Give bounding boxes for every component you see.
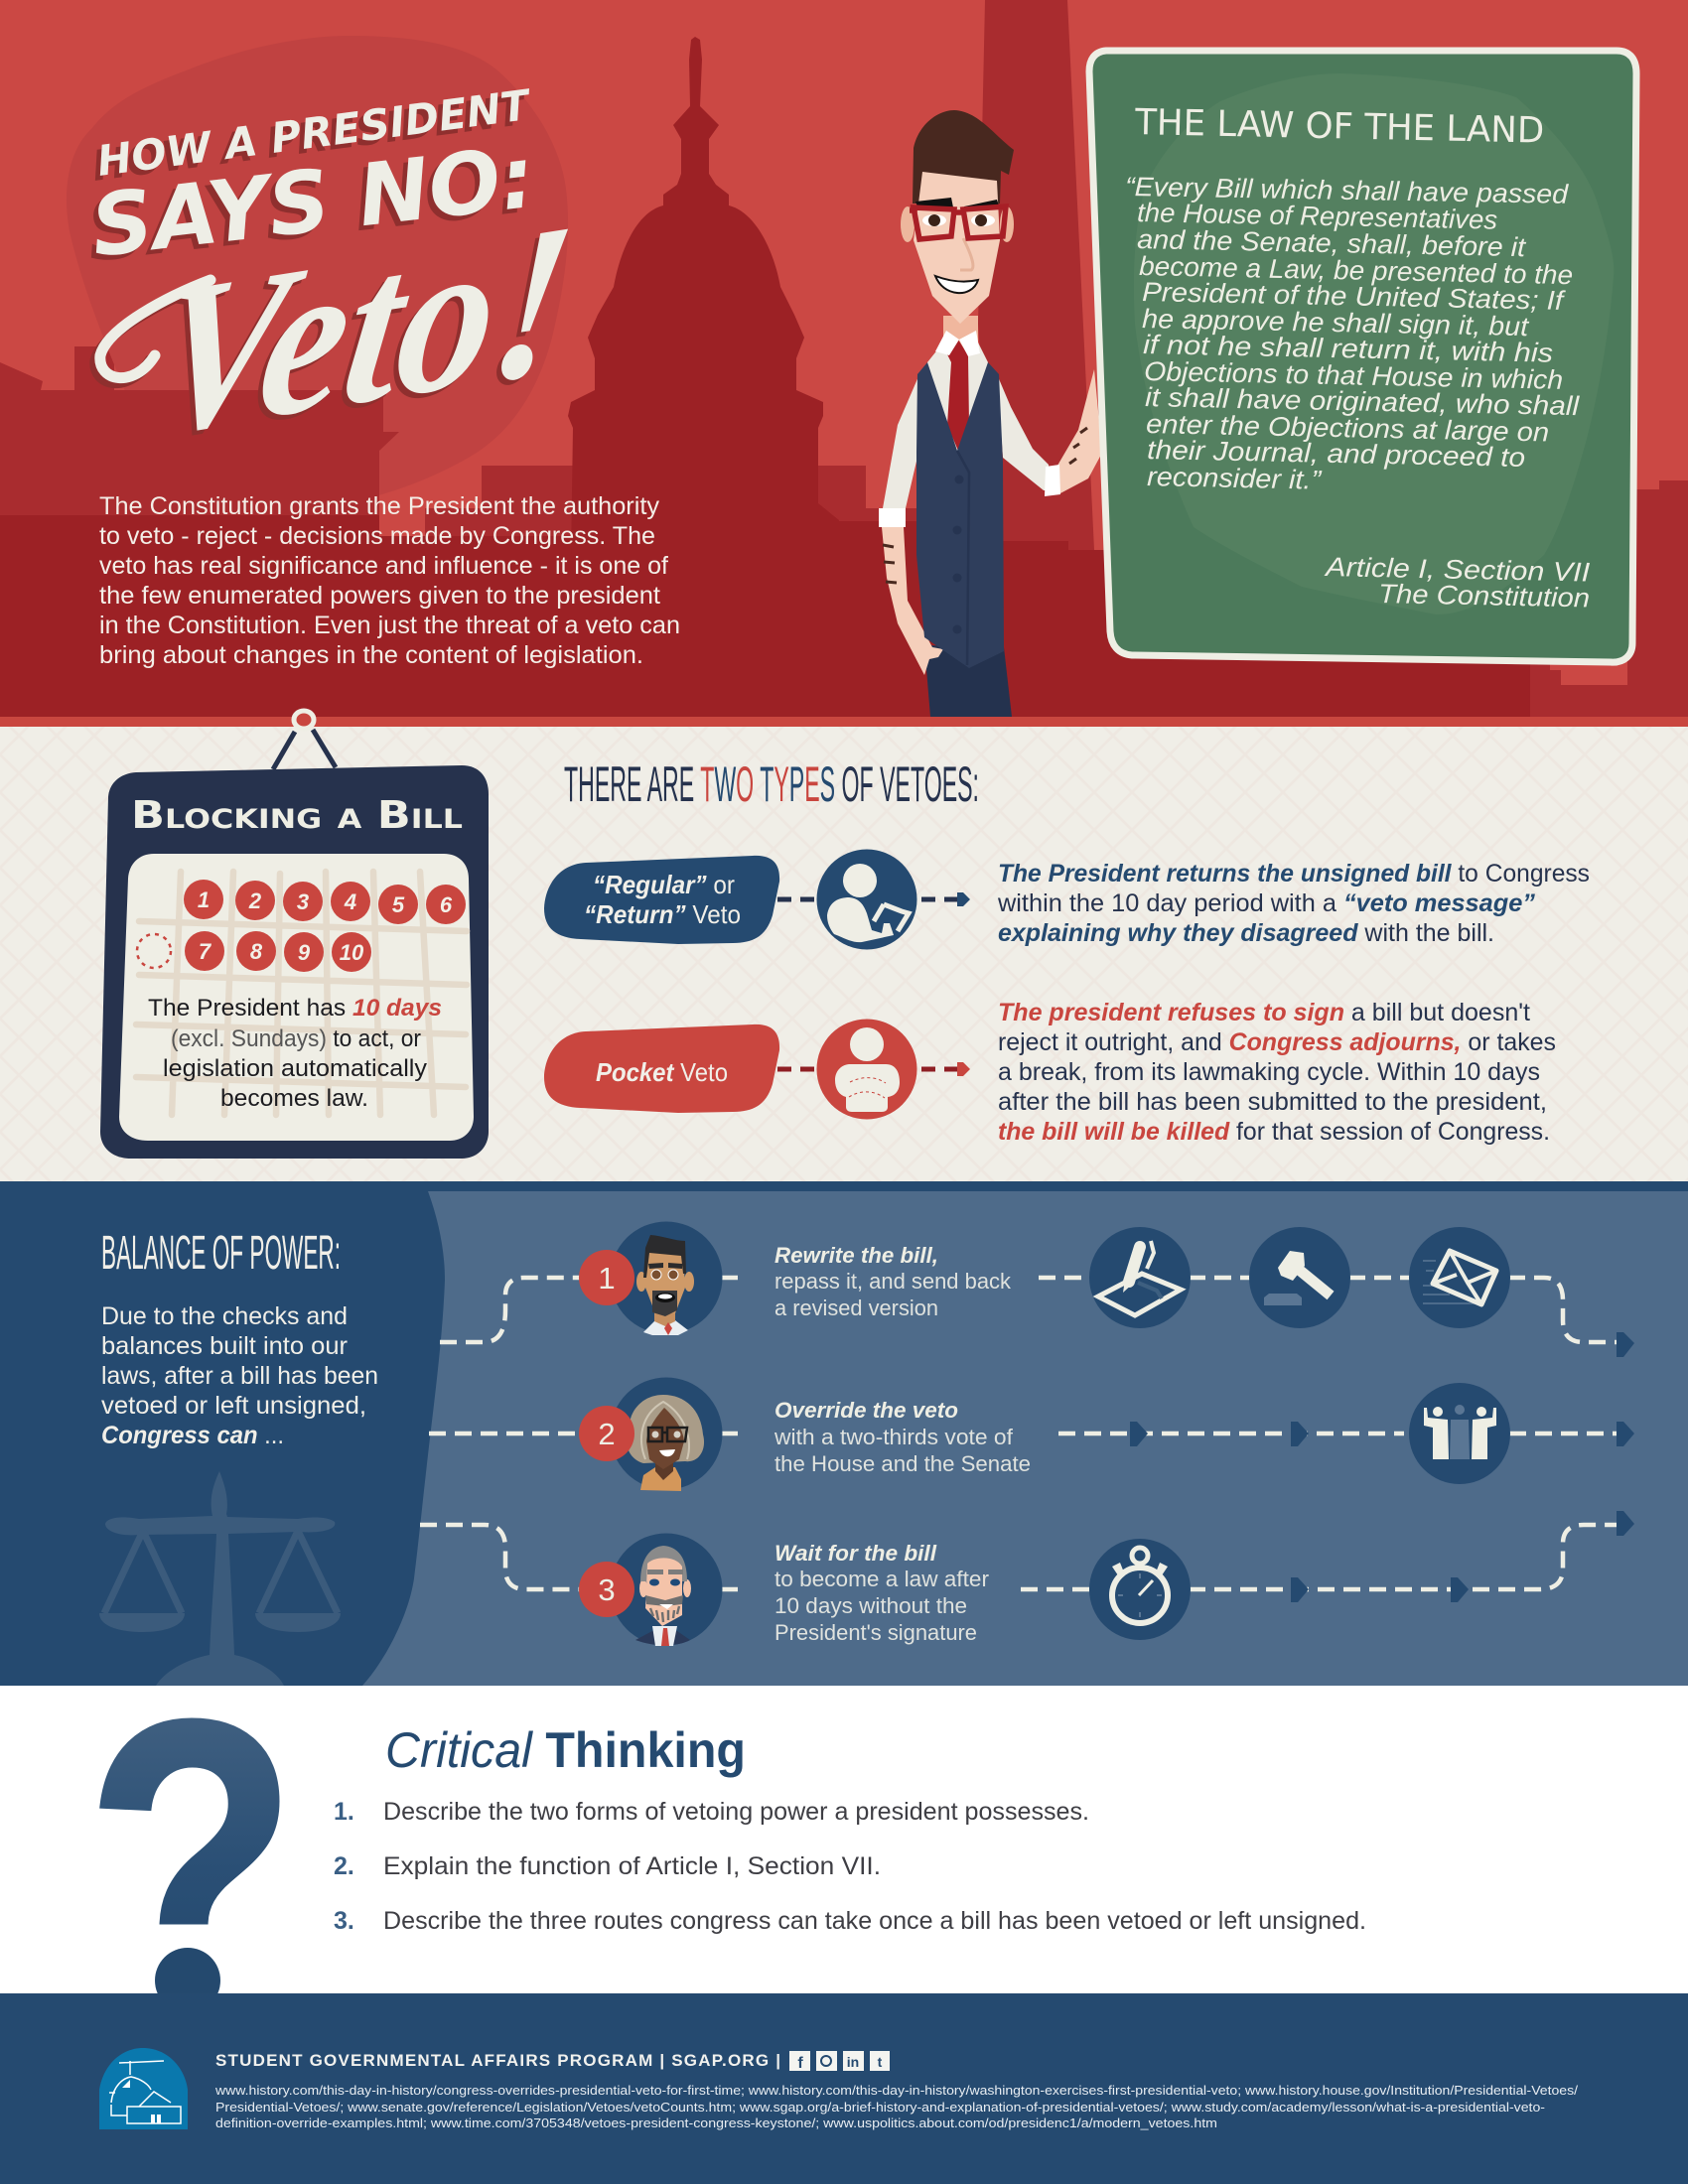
icon: congress members raising hands [1409,1383,1510,1484]
president character [879,110,1102,717]
calendar days [184,880,466,972]
calendar days: 4 [344,889,356,914]
intro paragraph: veto has real significance and influence - it is one of [99,552,668,580]
dashed Sunday marker [137,934,171,968]
pill: regular veto [544,856,779,944]
social icons: in [847,2054,859,2070]
references: definition-override-examples.html; www.time.com/3705348/vetoes-president-congress-keystone/; www.uspolitics.about.com/od/presidenc1/a/modern_vetoes.htm [215,2116,1217,2130]
smile [935,276,978,293]
left column shape [0,1191,445,1686]
icon: scales of justice [99,1471,341,1686]
question list: Explain the function of Article I, Section VII. [383,1852,881,1880]
description: pocket veto: The president refuses to sign a bill but doesn't [998,999,1530,1026]
route 3: text [774,1541,989,1645]
skyline: mid-tone buildings [0,0,1688,717]
references: Presidential-Vetoes/; www.senate.gov/reference/Legislation/Vetoes/vetoCounts.htm; www.sgap.org/a-brief-history-and-explanation-of-presidential-vetoes/; www.study.com/academy/lesson/what-is-a-presidential-veto- [215,2100,1545,2115]
question list: 1. [334,1798,354,1826]
calendar days: 6 [440,892,453,917]
route 2: text: Override the veto [774,1398,958,1423]
title line: How a President: HOW A PRESIDENT [94,80,535,186]
route 3 connectors [420,1525,1618,1589]
icon: reader [816,850,917,949]
calendar days: 1 [198,887,210,912]
social icons: t [878,2054,883,2070]
route 1: text [774,1243,1012,1320]
balance paragraph [101,1302,378,1449]
calendar title: Blocking a Bill [131,793,463,837]
description: regular veto: within the 10 day period with a “veto message” [997,889,1536,917]
panel: blocking a bill calendar [100,711,489,1159]
route 1: number badge [579,1250,634,1305]
pill: regular veto: “Return” Veto [584,899,741,929]
background blob [67,36,568,503]
constitution quote: the House of Representatives [1137,198,1497,235]
constitution quote: President of the United States; If [1142,277,1566,316]
question list: Describe the three routes congress can take once a bill has been vetoed or left unsigned. [383,1907,1366,1935]
route 1: avatar man with beard [610,1221,723,1335]
description: regular veto: The President returns the unsigned bill to Congress [998,860,1590,887]
panel: footer [0,1993,1688,2184]
tie [946,340,969,451]
panel: critical thinking [99,1717,1364,1993]
constitution quote: if not he shall return it, with his [1143,330,1553,368]
hair [913,110,1014,204]
description: regular veto [997,860,1590,947]
arrowhead [957,1062,970,1076]
balance paragraph: vetoed or left unsigned, [101,1392,366,1420]
route 3: number badge: 3 [598,1572,616,1607]
shirt [927,342,988,457]
route 2 connectors [429,1278,1618,1589]
nose [960,238,973,270]
constitution quote: enter the Objections at large on [1146,409,1549,448]
calendar days: 5 [392,892,405,917]
route 1: text: repass it, and send back [774,1269,1012,1294]
icon: question mark: ? [85,1635,298,2097]
calendar days: 8 [250,939,263,964]
route 2: avatar woman with glasses [610,1378,723,1491]
icon: stopwatch [1089,1539,1191,1640]
title swash [100,280,211,378]
calendar caption: becomes law. [220,1085,368,1112]
route 1 connectors [440,1278,1618,1342]
constitution quote: their Journal, and proceed to [1147,435,1525,473]
description: pocket veto: a break, from its lawmaking cycle. Within 10 days [998,1058,1540,1086]
balance paragraph: Congress can ... [101,1422,284,1449]
trousers [924,645,1012,717]
face [914,172,1000,324]
references [214,2083,1578,2130]
icon: envelope [1409,1227,1510,1328]
arrowhead [957,892,970,906]
question list [334,1798,1366,1935]
constitution quote: it shall have originated, who shall [1145,382,1581,421]
route 1: text: Rewrite the bill, [774,1243,938,1268]
calendar days: 2 [248,888,262,913]
board heading: THE LAW OF THE LAND [1134,102,1545,152]
calendar caption: legislation automatically [163,1055,427,1082]
panel: balance of power: BALANCE OF POWER: [101,1227,341,1280]
route 2: number badge [579,1406,634,1461]
connector [777,1066,957,1072]
hanging hook [273,711,336,769]
title [86,80,586,482]
route 2: text [774,1398,1031,1476]
icon: question mark [99,1717,280,1993]
constitution quote: reconsider it.” [1147,462,1323,495]
intro paragraph: The Constitution grants the President the authority [99,492,660,520]
description: pocket veto: after the bill has been submitted to the president, [998,1088,1547,1116]
panel: two types of vetoes background [0,717,1688,1181]
constitution quote: “Every Bill which shall have passed [1125,172,1569,209]
citation: Article I, Section VII [1324,552,1591,588]
glasses [910,206,1006,239]
route 3: avatar man with grey beard [610,1533,723,1646]
constitution quote: become a Law, be presented to the [1139,251,1573,290]
route 1: number badge: 1 [598,1261,616,1296]
calendar days: 10 [340,940,364,965]
intro paragraph: bring about changes in the content of legislation. [99,641,643,669]
description: pocket veto: reject it outright, and Congress adjourns, or takes [998,1028,1556,1056]
arm hair marks [883,428,1087,583]
route 2: number badge: 2 [598,1417,616,1451]
description: pocket veto [998,999,1556,1146]
calendar grid [136,872,467,1115]
pill: pocket veto [544,1024,779,1113]
social icons: f [797,2055,803,2072]
balance paragraph: laws, after a bill has been [101,1362,378,1390]
question list: 2. [334,1852,354,1880]
heading: critical thinking: Critical Thinking [385,1722,746,1778]
route 1: text: a revised version [774,1296,938,1320]
constitution quote: Objections to that House in which [1144,356,1563,395]
icon: gavel [1249,1227,1350,1328]
SGAP logo [99,2048,188,2129]
intro paragraph [99,492,680,669]
description: pocket veto: the bill will be killed for that session of Congress. [998,1118,1550,1146]
collar [935,331,980,356]
calendar caption [148,995,442,1112]
references: www.history.com/this-day-in-history/congress-overrides-presidential-veto-for-first-time; www.history.com/this-day-in-history/washington-exercises-first-presidential-veto; www.history.house.gov/Institution/Presidential-Vetoes/ [214,2083,1578,2098]
title word: Veto: Veto! [142,176,586,482]
row: regular veto [544,850,1590,949]
route 2: text: the House and the Senate [774,1451,1031,1476]
question list: 3. [334,1907,354,1935]
calendar days: 9 [298,940,311,965]
organisation line: STUDENT GOVERNMENTAL AFFAIRS PROGRAM | SGAP.ORG | [215,2051,780,2070]
intro paragraph: the few enumerated powers given to the president [99,582,660,610]
calendar frame [100,765,489,1159]
description: regular veto: explaining why they disagreed with the bill. [998,919,1494,947]
route 3: number badge [579,1562,634,1617]
balance paragraph: Due to the checks and [101,1302,348,1330]
pill: regular veto: “Regular” or [593,870,735,899]
arrowheads [1130,1332,1634,1602]
citation: The Constitution [1378,579,1590,613]
route 3: text: 10 days without the [774,1593,967,1618]
capitol dome silhouette [568,37,839,556]
panel: red header [0,0,1688,727]
calendar paper [119,854,474,1141]
calendar caption: (excl. Sundays) to act, or [171,1025,421,1052]
intro paragraph: in the Constitution. Even just the threat of a veto can [99,612,680,639]
neck [943,316,978,352]
connector [777,897,957,901]
title line: Says No: SAYS NO: [86,128,539,277]
eyebrows [915,198,999,211]
route 3: text: Wait for the bill [774,1541,937,1566]
route 2: text: with a two-thirds vote of [774,1425,1014,1449]
balance paragraph: balances built into our [101,1332,348,1360]
constitution quote: and the Senate, shall, before it [1137,224,1527,262]
icon: pen and paper [1089,1227,1191,1328]
right arm [1055,369,1102,494]
panel: chalkboard [1089,51,1636,662]
heading: two types of vetoes: THERE ARE TWO TYPES OF VETOES: [564,756,979,812]
chalk smudge [1134,73,1614,614]
skyline: dark foreground [0,515,1530,717]
pill: pocket veto: Pocket Veto [596,1057,728,1087]
ears [901,206,914,242]
eyes [922,214,995,226]
route 3: text: President's signature [774,1620,977,1645]
vest [916,362,1004,668]
left arm [882,527,943,675]
row: pocket veto [544,999,1556,1146]
constitution quote [1125,172,1581,495]
calendar days: 7 [199,939,212,964]
social icons [789,2051,890,2072]
calendar days: 3 [297,889,309,914]
citation [1324,552,1591,613]
question list: Describe the two forms of vetoing power a president possesses. [383,1798,1089,1826]
intro paragraph: to veto - reject - decisions made by Congress. The [99,522,655,550]
panel: balance of power [0,1181,1688,1686]
constitution quote: he approve he shall sign it, but [1142,304,1530,341]
icon: arms crossed [816,1019,917,1120]
calendar caption: The President has 10 days [148,995,442,1022]
route 3: text: to become a law after [774,1567,989,1591]
